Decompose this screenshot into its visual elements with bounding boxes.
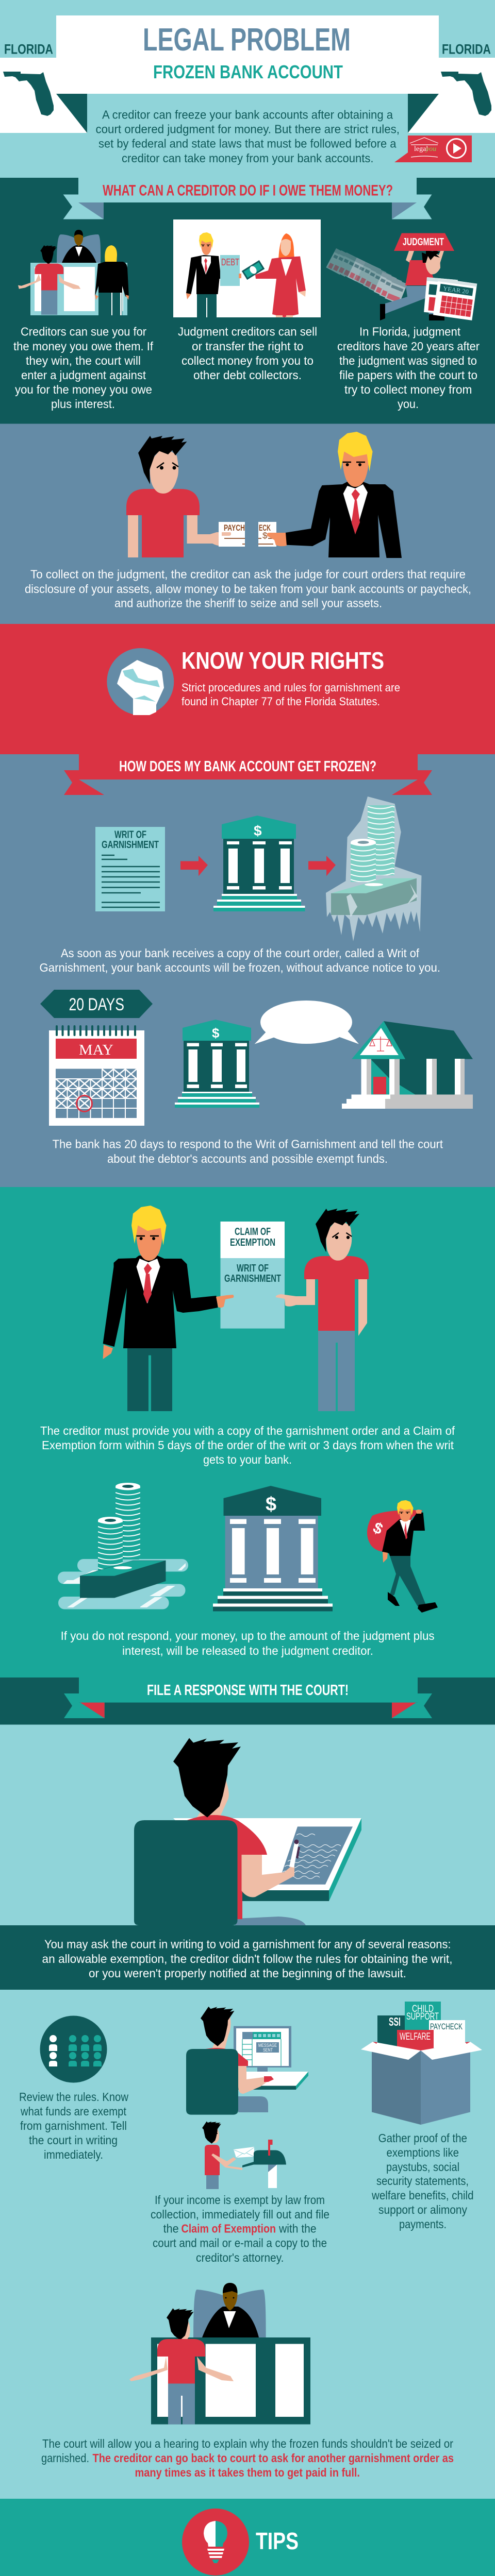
text: if your income is exempt: with the bbox=[278, 2222, 317, 2235]
icon: courthouse bbox=[342, 1021, 473, 1109]
icon: Florida map left bbox=[3, 72, 54, 116]
section: header background bbox=[0, 0, 495, 178]
icon: bank releases money: $ bbox=[266, 1494, 276, 1515]
text: creditors can sue bbox=[13, 325, 154, 411]
text: you may ask the court: an allowable exemption, the creditor didn't follow the rules for obtaining the writ, bbox=[42, 1952, 453, 1965]
illustration: debtor pointing bbox=[304, 1209, 369, 1411]
document: writ of garnishment bbox=[95, 827, 165, 911]
illustration: judgment lasts 20 years bbox=[326, 233, 477, 320]
illustration: creditor walking away with bag: $ bbox=[370, 1519, 386, 1538]
icon: bank releases money bbox=[213, 1486, 333, 1612]
text: gather proof bbox=[371, 2131, 473, 2231]
section: response steps bbox=[0, 1990, 495, 2499]
text: if your income is exempt: If your income is exempt by law from bbox=[155, 2193, 325, 2207]
text: review the rules: Review the rules. Know bbox=[19, 2090, 128, 2104]
text: judgment creditors can sell: Judgment creditors can sell bbox=[178, 325, 317, 338]
text: creditors can sue: plus interest. bbox=[51, 397, 115, 411]
illustration: frozen money bbox=[326, 796, 422, 941]
text: review the rules: the court in writing bbox=[29, 2133, 118, 2147]
text: gather proof: Gather proof of the bbox=[378, 2131, 467, 2145]
illustration: boxed proof documents: PAYCHECK bbox=[430, 2022, 463, 2031]
section: file a response band bbox=[0, 1677, 495, 1725]
icon: light bulb bbox=[182, 2509, 249, 2575]
text: you may ask the court bbox=[42, 1938, 453, 1980]
heading: tips: TIPS bbox=[256, 2528, 299, 2554]
illustration: boxed proof documents: SUPPORT bbox=[406, 2011, 439, 2022]
text: judgment creditors can sell bbox=[178, 325, 317, 382]
section: claim of exemption bbox=[0, 1187, 495, 1677]
text: creditor must provide: gets to your bank. bbox=[203, 1453, 292, 1466]
text: intro bbox=[96, 108, 400, 165]
section: writing response bbox=[0, 1725, 495, 1926]
ribbon: what can a creditor do: WHAT CAN A CREDITOR DO IF I OWE THEM MONEY? bbox=[103, 182, 393, 199]
text: you may ask the court: or you weren't properly notified at the beginning of the lawsuit. bbox=[89, 1967, 406, 1980]
text: in Florida 20 years bbox=[337, 325, 480, 411]
label: 20 days bbox=[40, 990, 153, 1018]
illustration: creditor pointing bbox=[103, 1206, 218, 1411]
document: claim of exemption: GARNISHMENT bbox=[224, 1273, 281, 1284]
text: if you do not respond bbox=[61, 1629, 435, 1657]
illustration: judgment lasts 20 years: YEAR 20 bbox=[442, 285, 469, 295]
document: claim of exemption: EXEMPTION bbox=[230, 1237, 275, 1248]
icon: calendar May: MAY bbox=[79, 1042, 113, 1058]
icon: bank: $ bbox=[254, 823, 262, 839]
icon: bank responds: $ bbox=[212, 1025, 220, 1041]
text: in Florida 20 years: the judgment was signed to bbox=[339, 354, 477, 367]
section: tips band bbox=[0, 2499, 495, 2576]
ribbon: how does my bank account get frozen: HOW DOES MY BANK ACCOUNT GET FROZEN? bbox=[119, 758, 376, 775]
illustration: man at computer: SENT bbox=[263, 2047, 273, 2053]
ribbon: file a response with the court bbox=[64, 1677, 432, 1718]
label: 20 days: 20 DAYS bbox=[69, 995, 124, 1014]
text: creditor must provide: The creditor must provide you with a copy of the garnishment order and a Claim of bbox=[40, 1424, 455, 1437]
section: know your rights bbox=[0, 624, 495, 754]
text: review the rules: what funds are exempt bbox=[20, 2105, 127, 2118]
text: in Florida 20 years: file papers with the court to bbox=[339, 368, 477, 382]
text: in Florida 20 years: you. bbox=[398, 397, 419, 411]
panel: debt transfer: DEBT bbox=[221, 257, 239, 267]
text: to collect on the judgment bbox=[25, 568, 471, 610]
text: chapter 77: found in Chapter 77 of the Florida Statutes. bbox=[182, 695, 380, 708]
illustration: creditor in suit bbox=[267, 432, 402, 558]
icon: Florida map right bbox=[441, 72, 491, 116]
arrow: bank to frozen money bbox=[308, 856, 336, 876]
text: gather proof: security statements, bbox=[376, 2174, 469, 2188]
paycheck torn in two: $ bbox=[262, 531, 268, 540]
document: claim of exemption: CLAIM OF bbox=[235, 1226, 271, 1238]
text: the court will allow: many times as it takes them to get paid in full. bbox=[135, 2466, 360, 2479]
speech bubble bbox=[255, 1001, 359, 1044]
illustration: man writing at desk bbox=[134, 1738, 361, 1925]
paycheck torn in two: PAYCH bbox=[224, 523, 245, 533]
panel: debt transfer bbox=[173, 219, 321, 317]
paycheck torn in two: ECK bbox=[259, 523, 271, 533]
text: if your income is exempt: the bbox=[163, 2222, 179, 2235]
text: the court will allow: garnished. bbox=[41, 2451, 89, 2465]
subtitle: FROZEN BANK ACCOUNT bbox=[153, 61, 343, 82]
text: creditors can sue: enter a judgment against bbox=[21, 368, 146, 382]
illustration: man mailing claim bbox=[202, 2122, 286, 2189]
text: gather proof: exemptions like bbox=[387, 2146, 459, 2159]
text: review the rules: immediately. bbox=[44, 2148, 103, 2161]
text: in Florida 20 years: In Florida, judgment bbox=[359, 325, 461, 338]
document: claim of exemption: WRIT OF bbox=[237, 1263, 269, 1274]
arrow: writ to bank bbox=[180, 856, 208, 876]
icon: fist bbox=[107, 648, 174, 715]
badge: LegalYou video tag bbox=[394, 135, 472, 162]
section: collecting on the judgment bbox=[0, 423, 495, 624]
text: intro: creditor can take money from your bank accounts. bbox=[122, 151, 373, 165]
text: to collect on the judgment: disclosure of your assets, allow money to be taken from your bank accounts or paycheck, bbox=[25, 582, 471, 596]
text: if your income is exempt bbox=[151, 2193, 329, 2264]
icon: calendar May bbox=[49, 1026, 144, 1126]
text: to collect on the judgment: To collect on the judgment, the creditor can ask the judge for court orders that require bbox=[30, 568, 466, 581]
text: intro: court ordered judgment for money. But there are strict rules, bbox=[96, 123, 400, 136]
icon: bank bbox=[213, 816, 305, 911]
text: as soon as bbox=[39, 946, 440, 974]
ribbon: what can a creditor do bbox=[63, 178, 432, 219]
text: judgment creditors can sell: or transfer the right to bbox=[192, 340, 303, 353]
text: review the rules: from garnishment. Tell bbox=[20, 2119, 127, 2132]
text: you may ask the court: You may ask the court in writing to void a garnishment for any of several reasons: bbox=[44, 1938, 451, 1951]
heading: know your rights: KNOW YOUR RIGHTS bbox=[182, 647, 384, 674]
illustration: court hearing bbox=[129, 2283, 310, 2425]
section: void a garnishment bbox=[0, 1925, 495, 1990]
text: if your income is exempt: creditor's attorney. bbox=[196, 2251, 284, 2264]
text: as soon as: Garnishment, your bank accounts will be frozen, without advance notice to you. bbox=[39, 961, 440, 974]
text: gather proof: welfare benefits, child bbox=[371, 2189, 473, 2202]
ribbon: how does my bank account get frozen bbox=[64, 754, 432, 795]
text: chapter 77 bbox=[182, 681, 400, 708]
text: the court will allow: The court will allow you a hearing to explain why the frozen funds shouldn't be seized or bbox=[42, 2437, 453, 2450]
document: writ of garnishment: GARNISHMENT bbox=[102, 839, 159, 851]
illustration: man at computer: MESSAGE bbox=[258, 2043, 277, 2048]
icon: bank responds bbox=[175, 1020, 259, 1108]
text: creditor must provide bbox=[40, 1424, 455, 1466]
badge: LegalYou video tag: you bbox=[425, 145, 436, 153]
illustration: boxed proof documents bbox=[361, 2002, 482, 2125]
section: creditor options bbox=[0, 178, 495, 424]
title: LEGAL PROBLEM bbox=[143, 22, 351, 58]
text: if you do not respond: interest, will be released to the judgment creditor. bbox=[122, 1644, 373, 1657]
illustration: man at computer bbox=[186, 2007, 308, 2115]
illustration: money unfrozen bbox=[58, 1483, 188, 1609]
text: if your income is exempt: collection, immediately fill out and file bbox=[151, 2208, 329, 2221]
icon: exempt people bbox=[40, 2015, 107, 2082]
illustration: judgment lasts 20 years: JUDGMENT bbox=[403, 236, 444, 248]
illustration: boxed proof documents: SSI bbox=[389, 2015, 401, 2028]
text: if your income is exempt: Claim of Exemption bbox=[182, 2222, 276, 2235]
illustration: debtor holding paycheck bbox=[126, 436, 232, 557]
document: claim of exemption bbox=[216, 1222, 315, 1329]
text: creditors can sue: they win, the court will bbox=[26, 354, 141, 367]
text: the bank has 20 days: about the debtor's accounts and possible exempt funds. bbox=[107, 1152, 388, 1165]
document: writ of garnishment: WRIT OF bbox=[114, 829, 146, 841]
text: judgment creditors can sell: collect money from you to bbox=[182, 354, 314, 367]
text: intro: A creditor can freeze your bank accounts after obtaining a bbox=[102, 108, 393, 122]
paycheck torn in two bbox=[219, 522, 276, 547]
section: how accounts get frozen bbox=[0, 754, 495, 1187]
illustration: court scene bbox=[18, 230, 129, 315]
label: Florida left: FLORIDA bbox=[4, 42, 53, 57]
badge: LegalYou video tag: legal bbox=[414, 145, 428, 153]
text: if you do not respond: If you do not respond, your money, up to the amount of the judgment plus bbox=[61, 1629, 435, 1642]
text: judgment creditors can sell: other debt collectors. bbox=[193, 368, 302, 382]
text: creditors can sue: Creditors can sue you for bbox=[21, 325, 146, 338]
text: the court will allow bbox=[41, 2437, 454, 2479]
text: gather proof: support or alimony bbox=[378, 2203, 467, 2216]
text: in Florida 20 years: creditors have 20 years after bbox=[337, 340, 480, 353]
text: chapter 77: Strict procedures and rules for garnishment are bbox=[182, 681, 400, 694]
text: creditor must provide: Exemption form within 5 days of the order of the writ or 3 days from when the writ bbox=[42, 1438, 454, 1452]
ribbon: file a response with the court: FILE A RESPONSE WITH THE COURT! bbox=[147, 1682, 349, 1699]
text: review the rules bbox=[19, 2090, 128, 2161]
illustration: creditor walking away with bag bbox=[367, 1500, 438, 1613]
illustration: boxed proof documents: WELFARE bbox=[400, 2031, 431, 2042]
text: creditors can sue: you for the money you owe bbox=[15, 383, 152, 396]
text: gather proof: paystubs, social bbox=[386, 2160, 459, 2174]
text: in Florida 20 years: try to collect money from bbox=[344, 383, 472, 396]
text: gather proof: payments. bbox=[399, 2217, 447, 2231]
text: creditors can sue: the money you owe them. If bbox=[13, 340, 154, 353]
text: as soon as: As soon as your bank receives a copy of the court order, called a Writ of bbox=[61, 946, 420, 960]
text: to collect on the judgment: and authorize the sheriff to seize and sell your assets. bbox=[114, 597, 382, 610]
illustration: boxed proof documents: CHILD bbox=[412, 2004, 434, 2014]
text: the bank has 20 days: The bank has 20 days to respond to the Writ of Garnishment and tell the court bbox=[53, 1138, 443, 1151]
text: the bank has 20 days bbox=[53, 1138, 443, 1165]
text: if your income is exempt: court and mail or e-mail a copy to the bbox=[153, 2236, 327, 2250]
text: intro: set by federal and state laws that must be followed before a bbox=[98, 137, 397, 150]
